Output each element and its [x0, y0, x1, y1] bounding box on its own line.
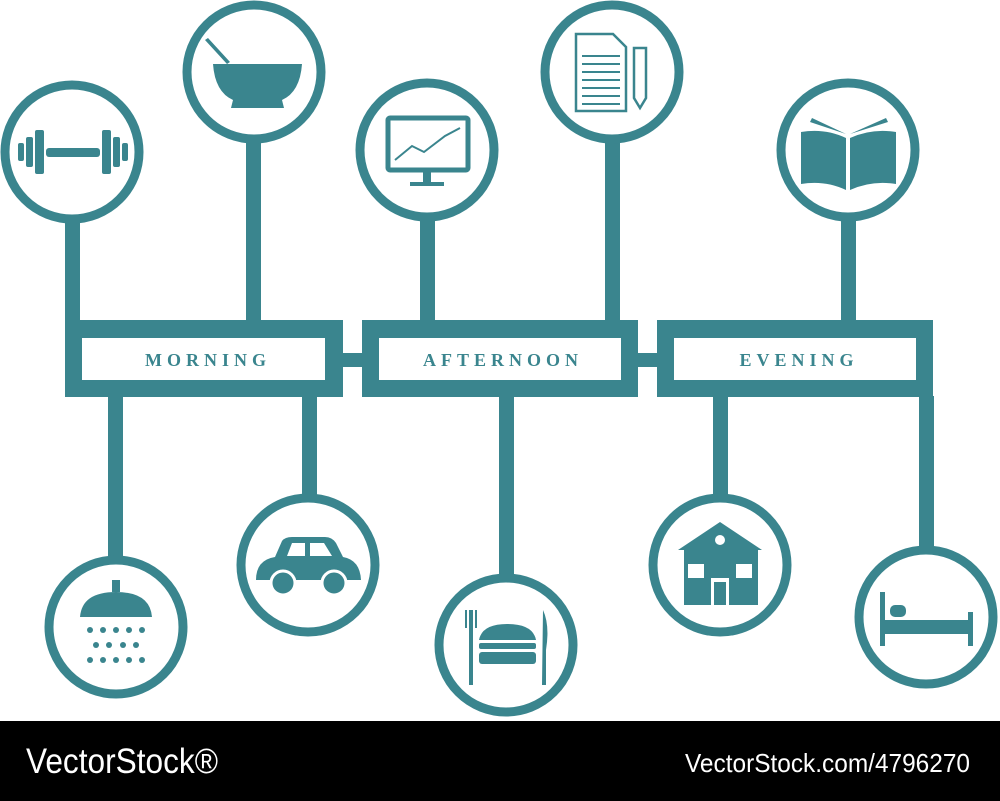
- box: evening: [657, 320, 933, 397]
- icon circle: shower: [49, 560, 183, 694]
- footer band: VectorStock®: [26, 742, 218, 781]
- icon circle: house: [653, 498, 787, 632]
- icon circle: bed: [859, 550, 993, 684]
- connectors bottom: [108, 396, 934, 576]
- box: morning: [65, 320, 343, 397]
- box: afternoon: AFTERNOON: [423, 350, 583, 370]
- footer band: [0, 721, 1000, 801]
- icon circle: book: [781, 83, 915, 217]
- icon circle: dumbbell: [5, 85, 139, 219]
- box: morning: MORNING: [145, 350, 271, 370]
- box: afternoon: [362, 320, 638, 397]
- icon circle: bowl: [187, 5, 321, 139]
- box: evening: EVENING: [739, 350, 859, 370]
- icon circle: chart: [360, 83, 494, 217]
- connectors top: [65, 140, 856, 322]
- icon circle: burger: [439, 578, 573, 712]
- box links: [343, 353, 658, 367]
- icon circle: car: [241, 498, 375, 632]
- icon circle: document: [545, 5, 679, 139]
- footer band: VectorStock.com/4796270: [685, 748, 970, 778]
